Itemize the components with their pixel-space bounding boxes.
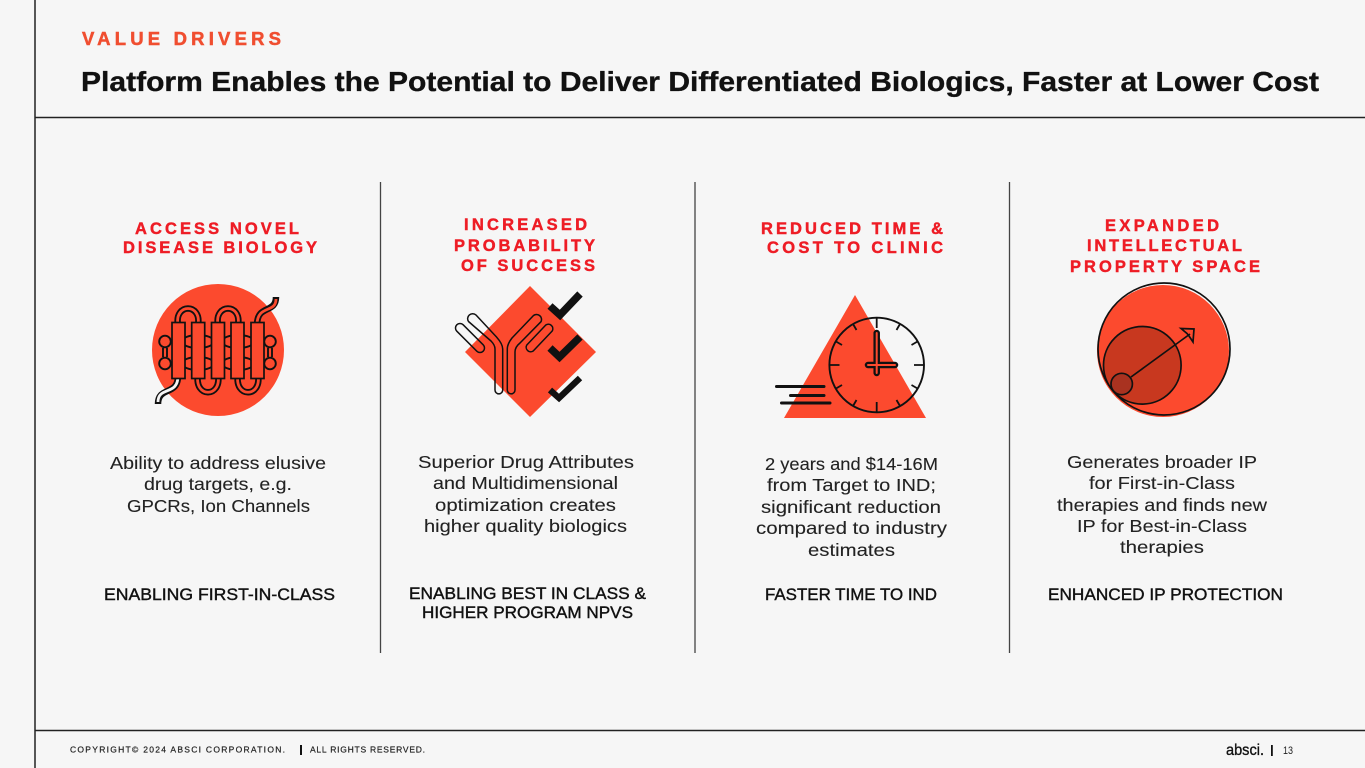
footer: copyright — [70, 744, 427, 755]
label: enabling best in class — [409, 584, 647, 622]
icon: membrane protein on red circle — [152, 284, 284, 416]
panel: reduced time and cost — [756, 220, 947, 604]
text: description: compared to industry — [756, 518, 947, 538]
heading: expanded intellectual property space: INTELLECTUAL — [1087, 237, 1246, 255]
text: description — [418, 452, 634, 536]
text: description: therapies and finds new — [1057, 495, 1267, 515]
heading: reduced time and cost to clinic — [761, 220, 947, 257]
panel: expanded intellectual property space — [1048, 217, 1283, 604]
heading: expanded intellectual property space — [1070, 217, 1264, 276]
heading: access novel disease biology — [123, 220, 321, 257]
text: description: therapies — [1120, 537, 1204, 557]
text: description: estimates — [808, 540, 895, 560]
text: description: IP for Best-in-Class — [1077, 516, 1247, 536]
heading: expanded intellectual property space: EXPANDED — [1105, 217, 1223, 235]
heading: access novel disease biology: DISEASE BIOLOGY — [123, 239, 321, 257]
text: description: from Target to IND; — [767, 475, 936, 495]
footer: copyright: ALL RIGHTS RESERVED. — [310, 744, 427, 754]
icon: antibody with checks on red diamond — [455, 286, 596, 417]
heading: expanded intellectual property space: PROPERTY SPACE — [1070, 258, 1264, 276]
icon: expanding circles with arrow — [1097, 283, 1230, 417]
text: description — [756, 454, 947, 560]
text: description — [110, 453, 326, 516]
footer: logo and page number: 13 — [1283, 745, 1293, 757]
heading: increased probability of success: INCREASED — [464, 216, 591, 234]
heading: reduced time and cost to clinic: REDUCED TIME & — [761, 220, 947, 238]
panel: increased probability of success — [409, 216, 647, 622]
text: description: Superior Drug Attributes — [418, 452, 634, 472]
footer: logo and page number: absci. — [1226, 742, 1264, 759]
heading: reduced time and cost to clinic: COST TO CLINIC — [767, 239, 947, 257]
heading: access novel disease biology: ACCESS NOVEL — [135, 220, 303, 238]
text: description: GPCRs, Ion Channels — [127, 496, 310, 516]
text: description: Generates broader IP — [1067, 452, 1257, 472]
footer: copyright: COPYRIGHT© 2024 ABSCI CORPORATION. — [70, 744, 287, 754]
heading: increased probability of success: PROBABILITY — [454, 237, 599, 255]
label: enabling first-in-class: ENABLING FIRST-IN-CLASS — [104, 585, 335, 604]
text: description — [1057, 452, 1267, 557]
text: description: Ability to address elusive — [110, 453, 326, 473]
text: description: significant reduction — [761, 497, 941, 517]
label: enabling best in class: HIGHER PROGRAM NPVS — [422, 603, 633, 622]
heading: increased probability of success — [454, 216, 599, 275]
text: description: optimization creates — [435, 495, 616, 515]
eyebrow: value drivers: VALUE DRIVERS — [82, 28, 286, 49]
label: enabling best in class: ENABLING BEST IN CLASS & — [409, 584, 647, 603]
footer: logo and page number — [1226, 742, 1293, 759]
text: description: higher quality biologics — [424, 516, 627, 536]
text: description: drug targets, e.g. — [144, 474, 292, 494]
panel: access novel disease biology — [104, 220, 335, 604]
text: description: for First-in-Class — [1089, 473, 1235, 493]
label: faster time to ind: FASTER TIME TO IND — [765, 585, 937, 604]
heading: increased probability of success: OF SUCCESS — [461, 257, 599, 275]
title: Platform Enables the Potential to Deliver Differentiated Biologics, Faster at Lower Cost — [81, 66, 1319, 97]
text: description: and Multidimensional — [433, 473, 618, 493]
icon: clock on red triangle — [776, 295, 926, 418]
text: description: 2 years and $14-16M — [765, 454, 938, 474]
label: enhanced ip protection: ENHANCED IP PROTECTION — [1048, 585, 1283, 604]
